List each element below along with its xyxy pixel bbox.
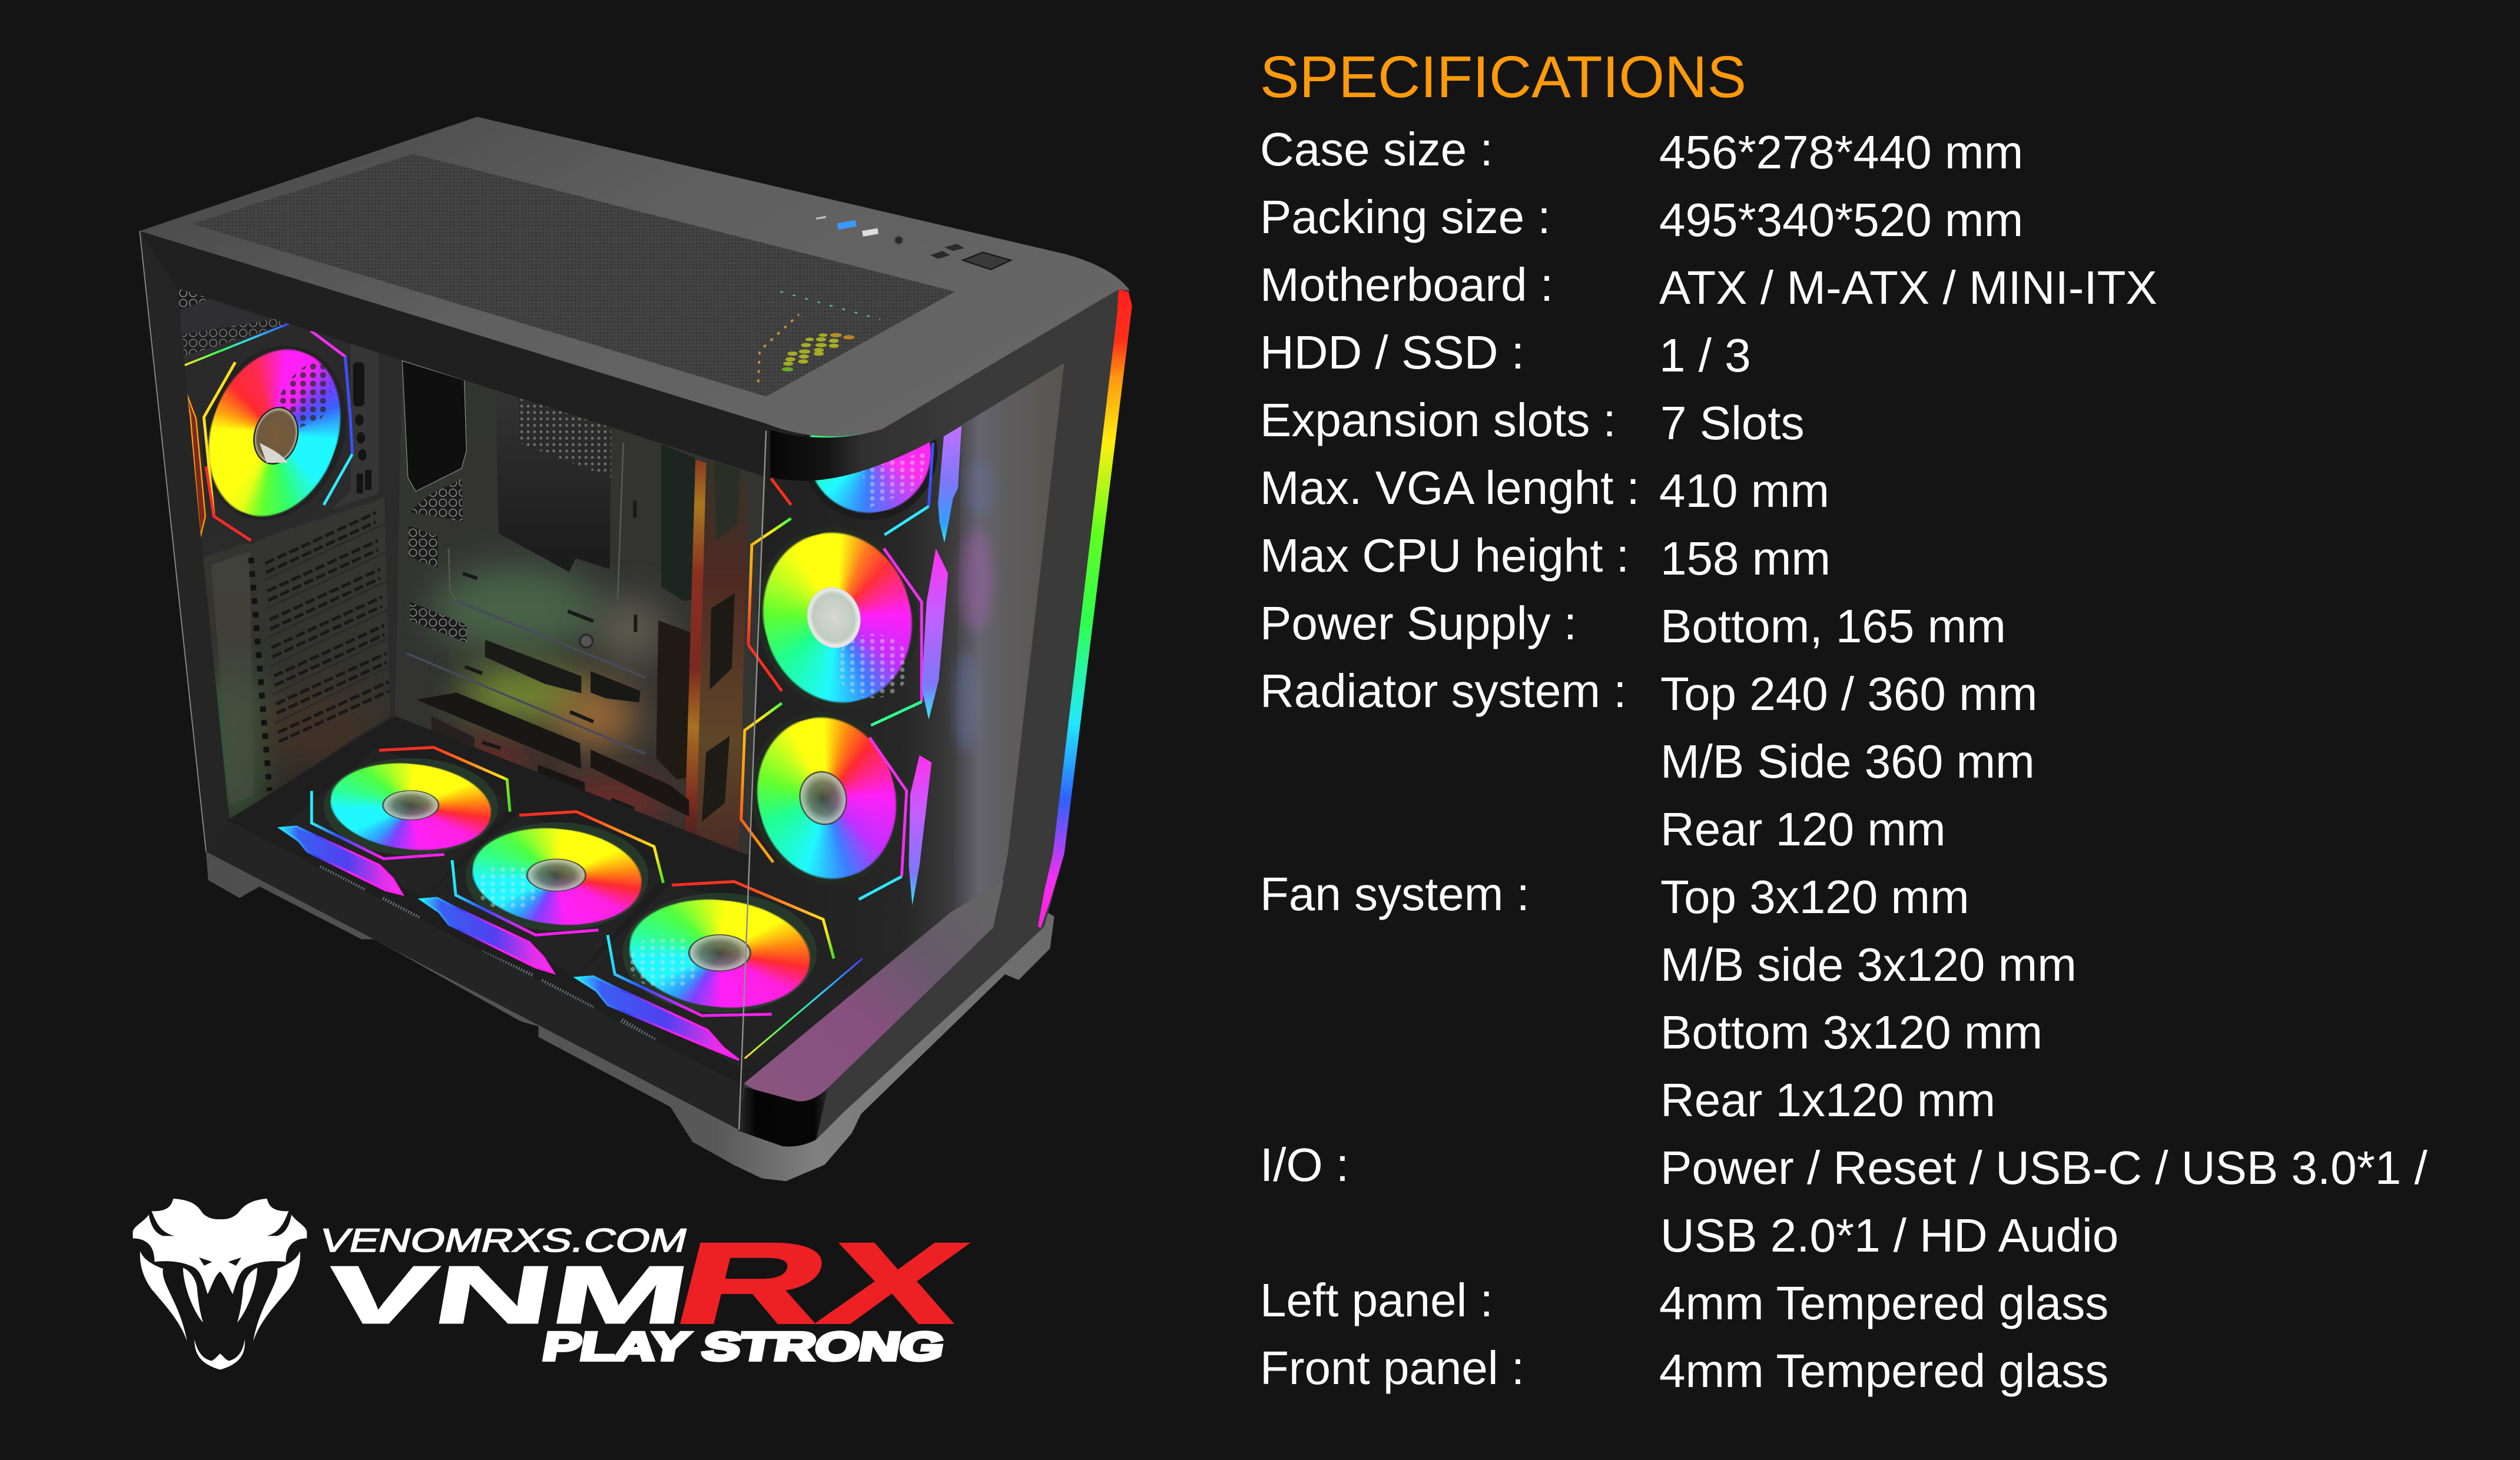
top mesh panel [192, 154, 955, 396]
row: front panel: Front panel : [1260, 1342, 1524, 1394]
fan: bottom right [576, 881, 863, 1060]
row: expansion slots [1260, 394, 1805, 449]
row: fan system: Fan system : [1260, 868, 1530, 920]
row: case size: Case size : [1260, 123, 1493, 175]
row: radiator system: Top 240 / 360 mm [1660, 668, 2037, 720]
icon: snake head [133, 1199, 307, 1370]
row: radiator system: Rear 120 mm [1660, 803, 1946, 855]
row: cpu height: Max CPU height : [1260, 529, 1629, 582]
right side panel body [738, 290, 1132, 1146]
left glass panel interior [178, 288, 765, 1129]
bottom mesh slivers [320, 868, 655, 1041]
floor [227, 716, 748, 1116]
front and side feet [206, 852, 1055, 1181]
tagline: PLAY STRONG [539, 1325, 947, 1369]
row: cpu height [1260, 529, 1831, 585]
row: io: USB 2.0*1 / HD Audio [1660, 1209, 2118, 1262]
row: cpu height: 158 mm [1660, 532, 1831, 585]
row: radiator system: M/B Side 360 mm [1660, 735, 2035, 788]
row: left panel: Left panel : [1260, 1274, 1493, 1326]
PC case illustration [140, 117, 1132, 1181]
fan: rear [179, 323, 370, 545]
row: hdd ssd: 1 / 3 [1659, 329, 1751, 381]
RGB light strip [1038, 290, 1132, 928]
row: power supply [1260, 597, 2006, 652]
top panel [140, 117, 1130, 436]
row: hdd ssd [1260, 326, 1751, 381]
wordmark VNM: VNM [319, 1250, 696, 1340]
row: vga length: 410 mm [1659, 464, 1829, 517]
fan: side lower [732, 695, 931, 905]
row: motherboard: Motherboard : [1260, 258, 1553, 311]
row: expansion slots: Expansion slots : [1260, 394, 1616, 446]
row: case size: 456*278*440 mm [1659, 126, 2023, 178]
row: radiator system: Radiator system : [1260, 665, 1626, 717]
case frame over left panel [140, 231, 961, 1130]
fan: side middle [737, 509, 948, 726]
logo: VNM RX [133, 1199, 979, 1370]
row: front panel [1260, 1342, 2108, 1397]
row: fan system: M/B side 3x120 mm [1660, 938, 2077, 991]
row: power supply: Bottom, 165 mm [1660, 600, 2006, 652]
row: left panel [1260, 1274, 2108, 1329]
row: packing size: Packing size : [1260, 191, 1551, 243]
row: front panel: 4mm Tempered glass [1659, 1345, 2108, 1397]
row: case size [1260, 123, 2023, 178]
front I/O ports [816, 216, 1011, 270]
row: fan system: Top 3x120 mm [1660, 871, 1969, 923]
row: io: I/O : [1260, 1139, 1349, 1191]
row: packing size [1260, 191, 2023, 246]
row: fan system [1260, 868, 2077, 1126]
row: left panel: 4mm Tempered glass [1659, 1277, 2108, 1329]
row: vga length: Max. VGA lenght : [1260, 462, 1640, 514]
bottom fan frames [280, 748, 863, 1069]
back wall with expansion slots [175, 287, 402, 823]
row: motherboard: ATX / M-ATX / MINI-ITX [1659, 261, 2157, 314]
row: fan system: Bottom 3x120 mm [1660, 1006, 2042, 1058]
row: radiator system [1260, 665, 2037, 855]
fan: side top (partly hidden) [771, 381, 961, 543]
motherboard tray with rainbow reflections [395, 356, 766, 859]
title: SPECIFICATIONS [1260, 44, 1746, 110]
specifications table [1260, 123, 2428, 1397]
row: expansion slots: 7 Slots [1660, 397, 1805, 449]
fan: bottom middle [421, 812, 664, 973]
row: motherboard [1260, 258, 2157, 314]
row: io: Power / Reset / USB-C / USB 3.0*1 / [1660, 1142, 2428, 1194]
row: packing size: 495*340*520 mm [1659, 194, 2023, 246]
row: io [1260, 1139, 2428, 1262]
website url: VENOMRXS.COM [316, 1223, 691, 1259]
row: vga length [1260, 462, 1829, 517]
row: hdd ssd: HDD / SSD : [1260, 326, 1524, 379]
row: power supply: Power Supply : [1260, 597, 1577, 649]
fan: bottom left [280, 748, 510, 894]
wordmark RX: RX [663, 1219, 979, 1347]
row: fan system: Rear 1x120 mm [1660, 1074, 1995, 1126]
